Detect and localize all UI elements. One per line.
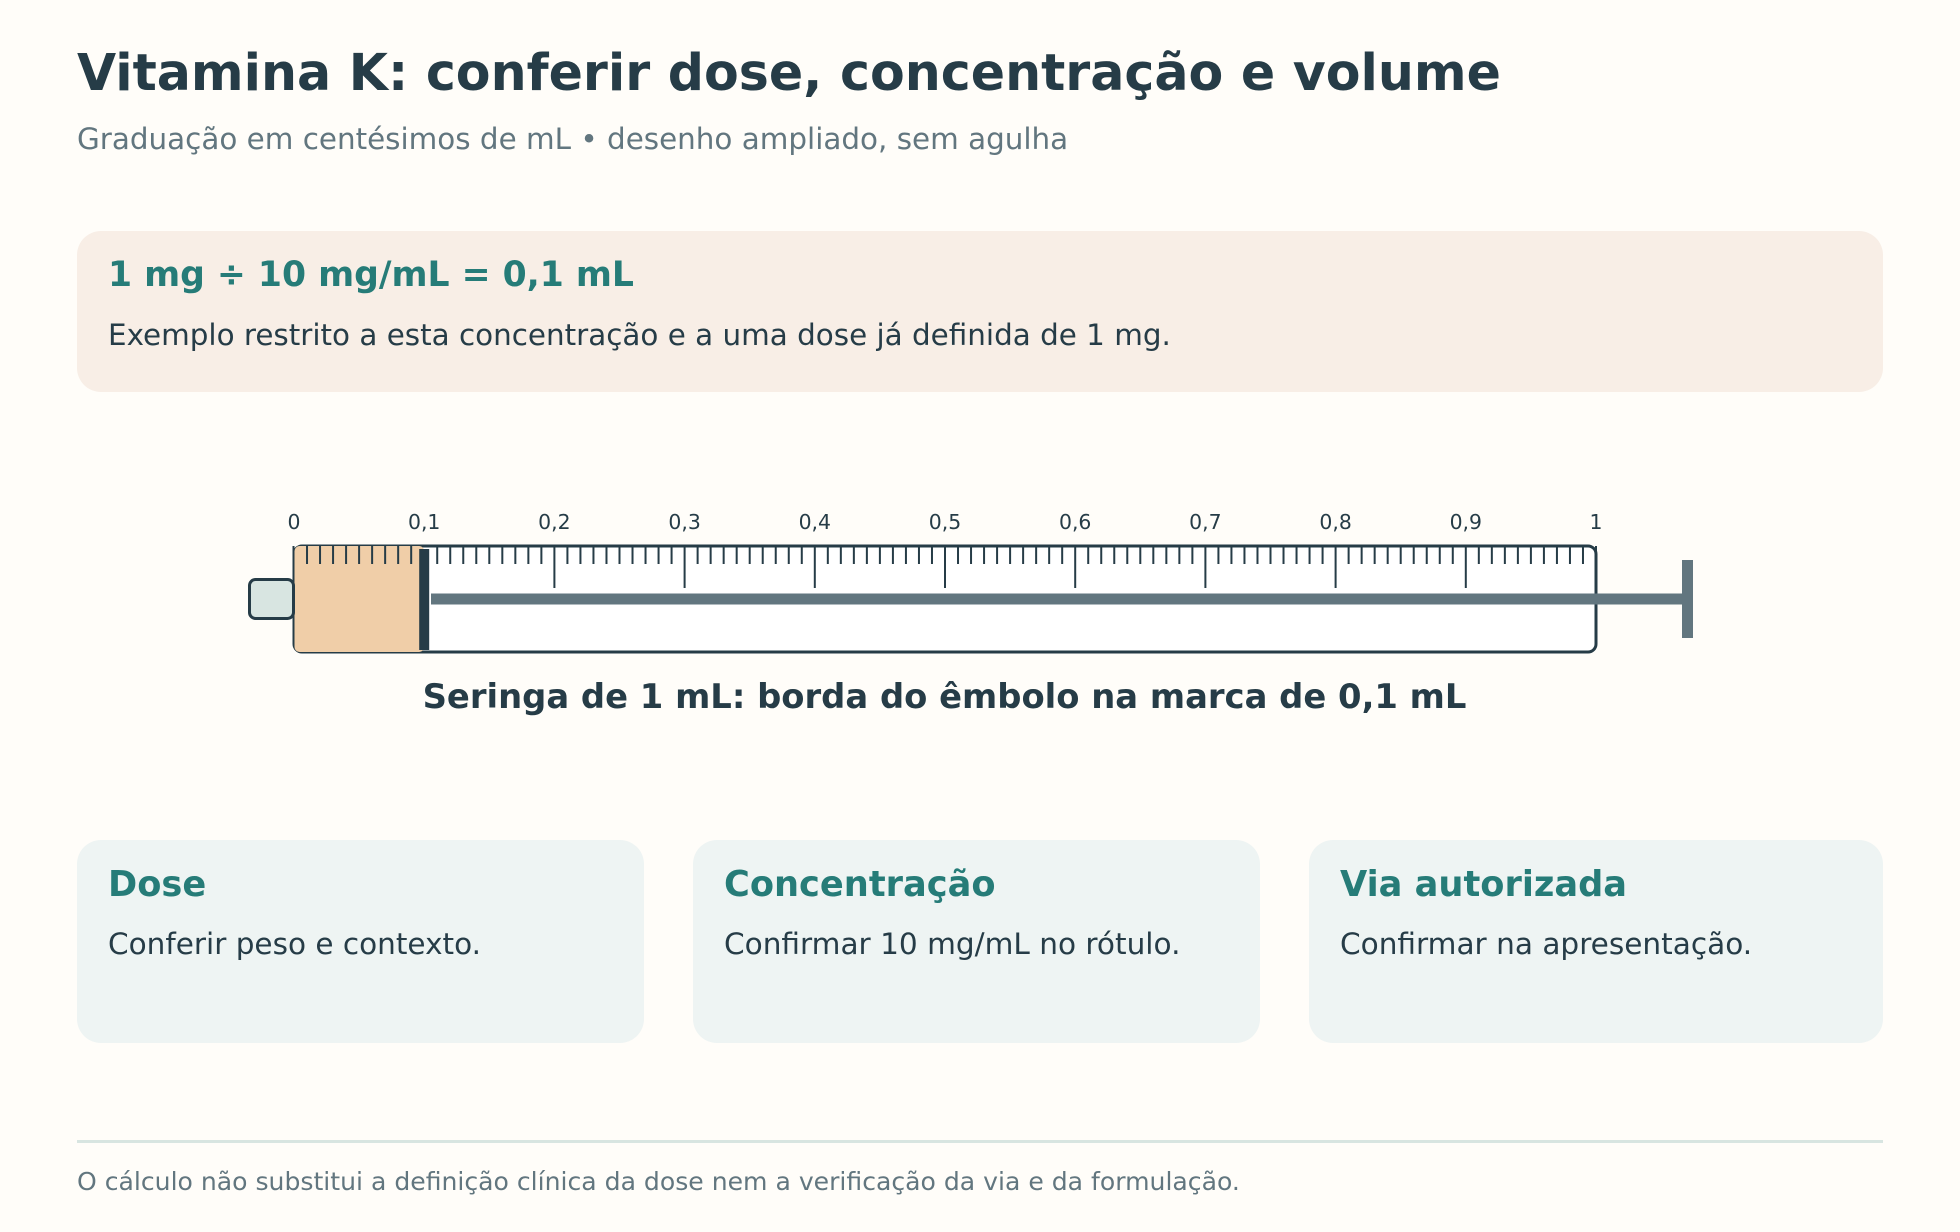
route heading: Via autorizada	[1340, 864, 1627, 905]
title: Vitamina K: conferir dose, concentração e volume	[77, 43, 1501, 102]
dose text: Conferir peso e contexto.	[108, 927, 481, 961]
scale labels: 0,5	[929, 510, 961, 534]
scale labels: 0,4	[799, 510, 831, 534]
panel: concentration	[693, 840, 1260, 1043]
major ticks	[294, 546, 1596, 588]
dose liquid fill	[294, 546, 424, 652]
plunger rod	[431, 594, 1682, 604]
scale labels: 1	[1590, 510, 1602, 534]
scale labels: 0,6	[1059, 510, 1091, 534]
scale labels	[288, 510, 1602, 534]
plunger thumb rest	[1682, 560, 1693, 638]
formula note: Exemplo restrito a esta concentração e a uma dose já definida de 1 mg.	[108, 318, 1171, 352]
scale labels: 0,7	[1189, 510, 1222, 534]
barrel	[294, 546, 1596, 652]
concentration text: Confirmar 10 mg/mL no rótulo.	[724, 927, 1180, 961]
plunger stopper	[419, 549, 429, 650]
scale labels: 0,8	[1319, 510, 1352, 534]
scale labels: 0,2	[538, 510, 571, 534]
panel: dose	[77, 840, 644, 1043]
scale labels: 0,3	[668, 510, 701, 534]
scale labels: 0,9	[1450, 510, 1482, 534]
minor ticks	[307, 546, 1583, 564]
nozzle tip	[250, 580, 294, 618]
route text: Confirmar na apresentação.	[1340, 927, 1752, 961]
panel: route	[1309, 840, 1883, 1043]
formula heading: 1 mg ÷ 10 mg/mL = 0,1 mL	[108, 255, 634, 295]
scale labels: 0	[288, 510, 300, 534]
syringe caption: Seringa de 1 mL: borda do êmbolo na marca de 0,1 mL	[423, 677, 1466, 716]
syringe diagram	[250, 510, 1693, 652]
dose heading: Dose	[108, 864, 206, 905]
footer note: O cálculo não substitui a definição clínica da dose nem a verificação da via e da formulação.	[77, 1167, 1240, 1196]
scale labels: 0,1	[408, 510, 440, 534]
panel: formula	[77, 231, 1883, 392]
subtitle: Graduação em centésimos de mL • desenho ampliado, sem agulha	[77, 122, 1068, 156]
concentration heading: Concentração	[724, 864, 996, 905]
